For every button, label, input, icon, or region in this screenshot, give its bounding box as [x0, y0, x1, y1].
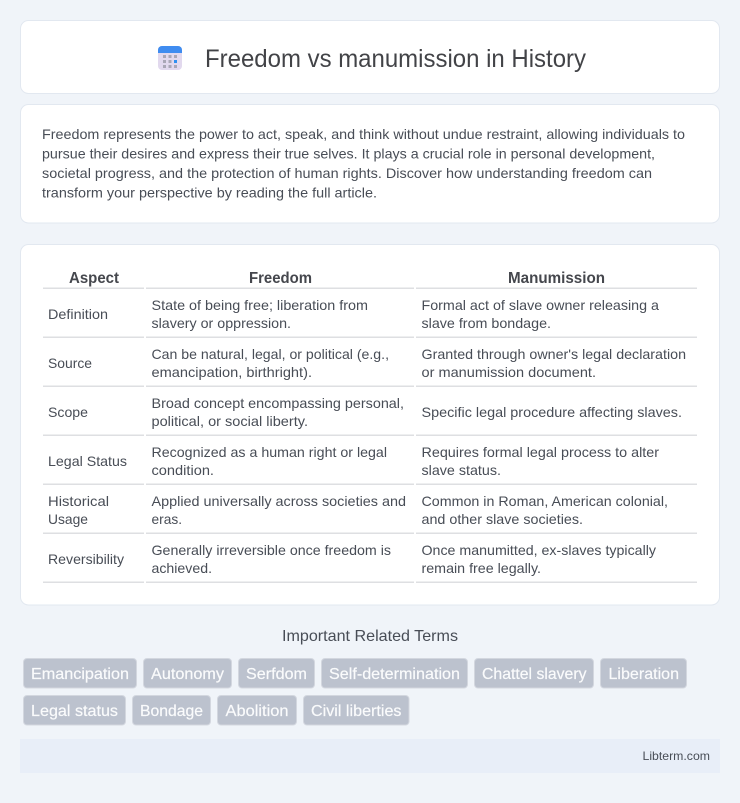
title: Freedom vs manumission in History: [205, 45, 586, 73]
row: source: Can be natural, legal, or political (e.g.,: [152, 346, 389, 362]
icon: calendar: [158, 46, 182, 70]
row: definition: Formal act of slave owner releasing a: [422, 297, 659, 313]
footer credit: Libterm.com: [642, 749, 710, 763]
row: definition: slavery or oppression.: [152, 315, 291, 331]
panel: intro paragraph: pursue their desires and express their true selves. It plays a crucial role in personal development,: [42, 146, 655, 162]
tag: Civil liberties: Civil liberties: [311, 703, 402, 720]
row: source: emancipation, birthright).: [152, 364, 312, 380]
tag: Autonomy: Autonomy: [151, 666, 224, 683]
tag: Legal status: Legal status: [31, 703, 118, 720]
panel: intro paragraph: societal progress, and the protection of human rights. Discover how understanding freedom can: [42, 165, 652, 181]
tag: Bondage: [132, 696, 210, 725]
row: definition: State of being free; liberation from: [152, 297, 368, 313]
tag: Abolition: [218, 696, 296, 725]
row: historical usage: Common in Roman, American colonial,: [422, 493, 668, 509]
row: reversibility: achieved.: [152, 560, 212, 576]
heading: related terms: Important Related Terms: [282, 628, 458, 645]
row: legal status: Recognized as a human right or legal: [152, 444, 387, 460]
tag: Chattel slavery: Chattel slavery: [482, 666, 586, 683]
tag: Emancipation: [24, 658, 136, 688]
panel: comparison table: [20, 244, 720, 605]
row: historical usage: and other slave societies.: [422, 511, 583, 527]
row: source: Granted through owner's legal declaration: [422, 346, 686, 362]
row: reversibility: Once manumitted, ex-slaves typically: [422, 542, 656, 558]
row: scope: Broad concept encompassing personal,: [152, 395, 404, 411]
table header row: Manumission: [508, 270, 605, 287]
row: historical usage: Applied universally across societies and: [152, 493, 406, 509]
row: source: or manumission document.: [422, 364, 596, 380]
row: source: [48, 346, 686, 380]
tag: Liberation: Liberation: [608, 666, 679, 683]
row: reversibility: Generally irreversible once freedom is: [152, 542, 391, 558]
row: historical usage: eras.: [152, 511, 182, 527]
tag: Self-determination: Self-determination: [329, 666, 460, 683]
related term tags: [24, 658, 686, 725]
row: legal status: slave status.: [422, 462, 501, 478]
table header row: Freedom: [249, 270, 312, 287]
row: legal status: Legal Status: [48, 453, 127, 469]
tag: Autonomy: [144, 658, 232, 688]
row: definition: Definition: [48, 306, 108, 322]
row: scope: political, or social liberty.: [152, 413, 308, 429]
tag: Civil liberties: [304, 696, 409, 725]
tag: Legal status: [24, 696, 126, 725]
panel: intro paragraph: Freedom represents the power to act, speak, and think without undue restraint, allowing individuals to: [42, 126, 685, 142]
tag: Liberation: [600, 658, 686, 688]
tag: Abolition: Abolition: [226, 703, 288, 720]
tag: Emancipation: Emancipation: [31, 666, 129, 683]
row: historical usage: [48, 493, 668, 527]
row: legal status: Requires formal legal process to alter: [422, 444, 659, 460]
tag: Serfdom: Serfdom: [246, 666, 307, 683]
row: legal status: [48, 444, 659, 478]
table rules: [43, 288, 697, 583]
row: definition: [48, 297, 659, 331]
row: reversibility: [48, 542, 656, 576]
row: legal status: condition.: [152, 462, 214, 478]
panel: intro paragraph: transform your perspective by reading the full article.: [42, 184, 377, 200]
tag: Serfdom: [238, 658, 314, 688]
table header row: [69, 270, 605, 287]
row: definition: slave from bondage.: [422, 315, 551, 331]
row: scope: Scope: [48, 404, 88, 420]
row: reversibility: remain free legally.: [422, 560, 541, 576]
row: reversibility: Reversibility: [48, 551, 124, 567]
header panel: [20, 20, 720, 94]
tag: Bondage: Bondage: [140, 703, 203, 720]
row: source: Source: [48, 355, 92, 371]
row: historical usage: Usage: [48, 511, 88, 527]
panel: intro paragraph: [20, 104, 720, 223]
table header row: Aspect: [69, 270, 120, 287]
row: scope: [48, 395, 682, 429]
row: historical usage: Historical: [48, 493, 109, 509]
tag: Chattel slavery: [474, 658, 594, 688]
footer bar: [20, 739, 720, 773]
row: scope: Specific legal procedure affecting slaves.: [422, 404, 682, 420]
tag: Self-determination: [322, 658, 468, 688]
